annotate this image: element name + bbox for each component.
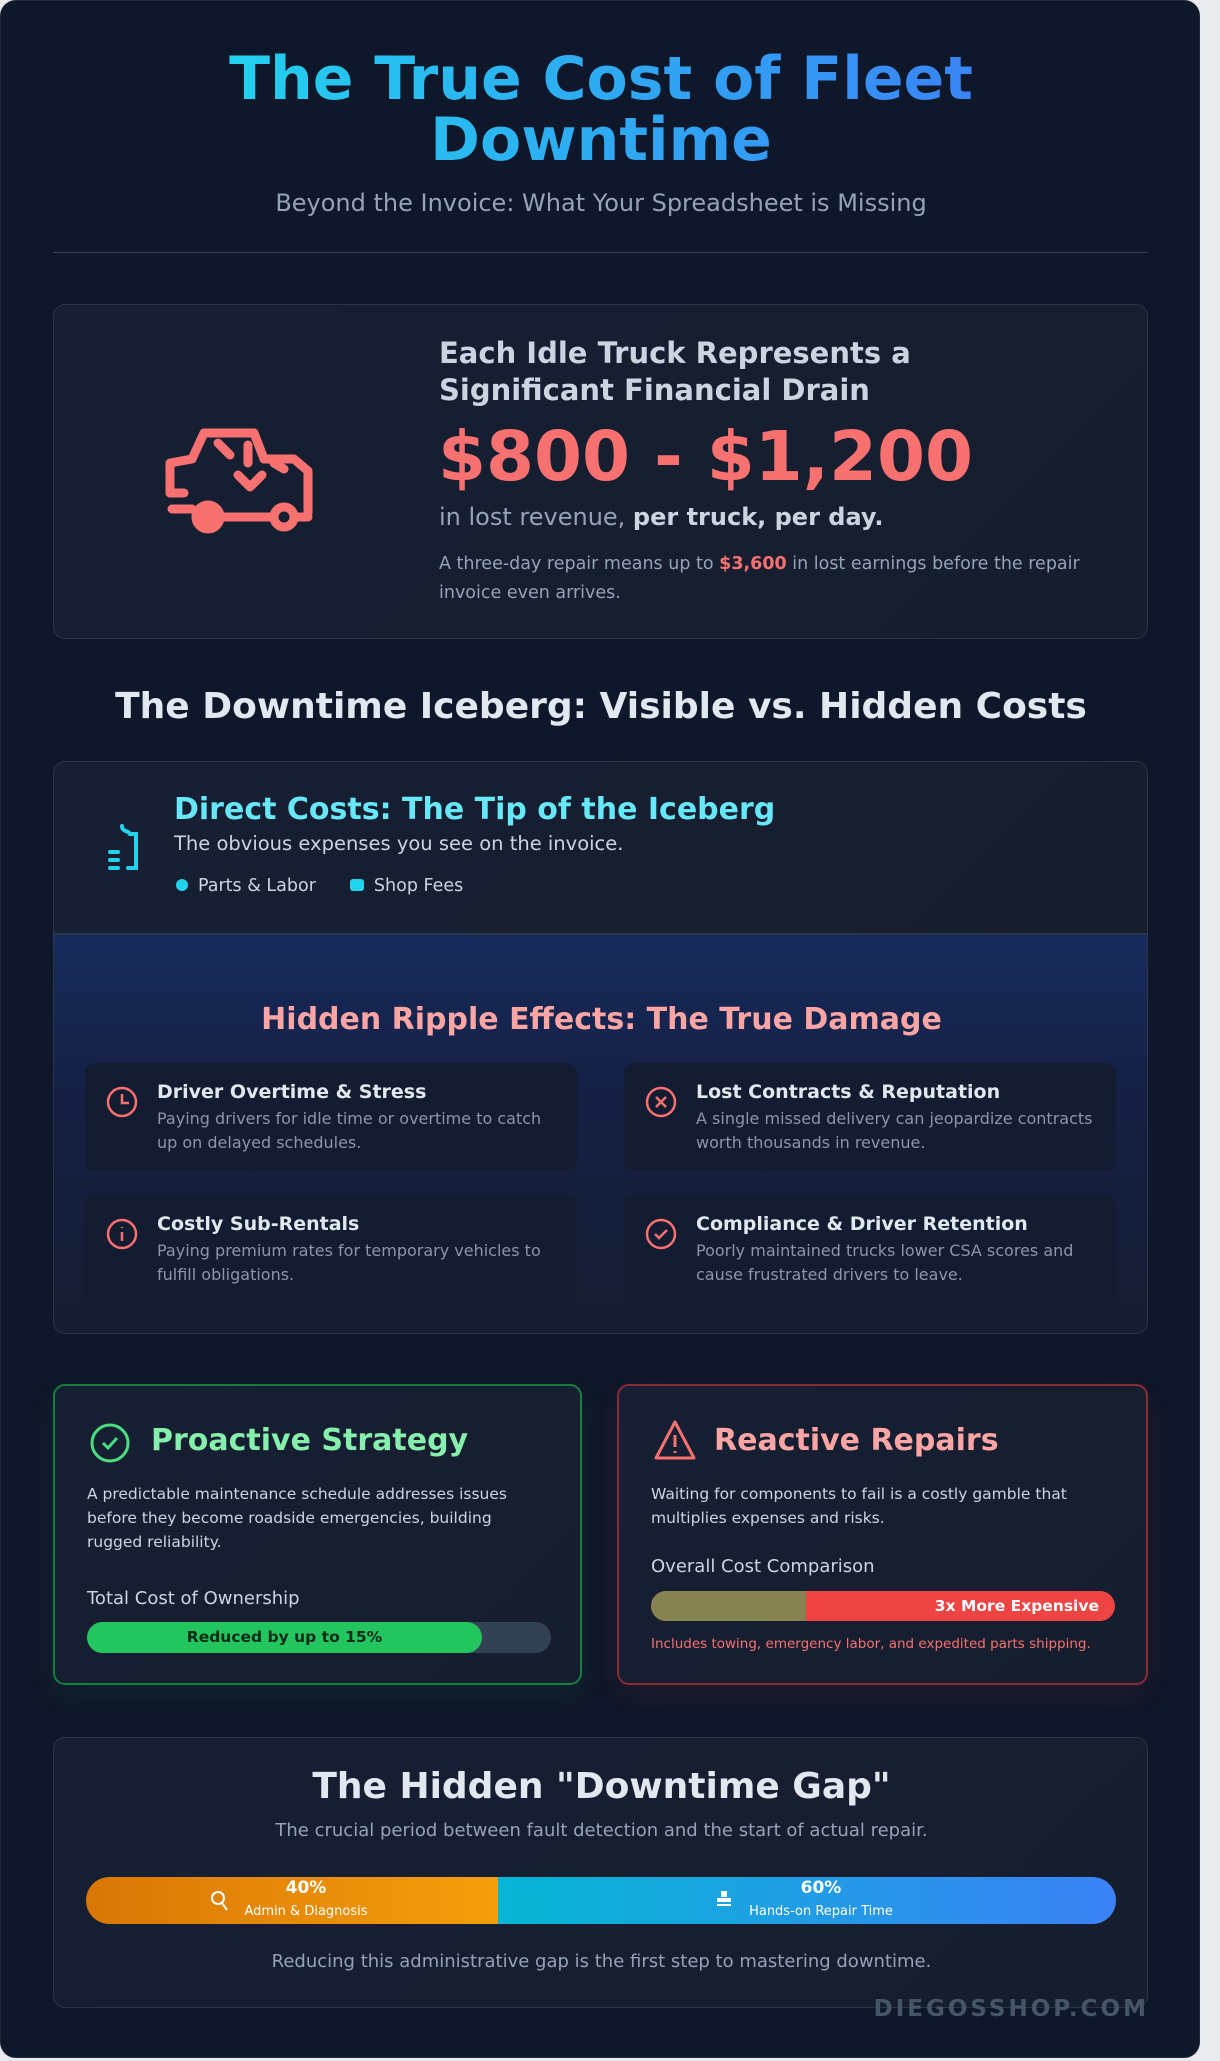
heading bbox=[439, 336, 911, 407]
icon: truck bbox=[166, 428, 312, 534]
panel: direct costs bbox=[53, 761, 1148, 934]
card: contracts: A single missed delivery can jeopardize contracts worth thousands in revenue. bbox=[696, 1109, 1092, 1152]
bar: TCO bbox=[87, 1622, 551, 1653]
revenue text: in lost revenue, per truck, per day. bbox=[439, 503, 883, 531]
section heading: The Downtime Iceberg: Visible vs. Hidden Costs bbox=[115, 686, 1087, 727]
icon: receipt bbox=[108, 824, 138, 870]
subtitle: The crucial period between fault detection and the start of actual repair. bbox=[275, 1820, 928, 1841]
title: Reactive Repairs bbox=[714, 1423, 999, 1458]
heading: Hidden Ripple Effects: The True Damage bbox=[261, 1002, 942, 1037]
tags: Parts & Labor Shop Fees bbox=[198, 876, 463, 896]
segment: admin: Admin & Diagnosis bbox=[244, 1904, 368, 1919]
icon: warning bbox=[654, 1420, 696, 1460]
heading: Each Idle Truck Represents a bbox=[439, 336, 911, 370]
bar: TCO: Reduced by up to 15% bbox=[187, 1628, 382, 1646]
big number: $800 - $1,200 bbox=[438, 417, 973, 497]
desc: Waiting for components to fail is a costly gamble that multiplies expenses and risks. bbox=[651, 1485, 1067, 1527]
title: Direct Costs: The Tip of the Iceberg bbox=[174, 792, 775, 827]
subtitle: The obvious expenses you see on the invoice. bbox=[174, 832, 623, 855]
note: A three-day repair means up to $3,600 in lost earnings before the repair invoice even arrives. bbox=[439, 554, 1080, 603]
title: Proactive Strategy bbox=[151, 1423, 468, 1458]
panel: downtime gap bbox=[53, 1737, 1148, 2008]
card: contracts: Lost Contracts & Reputation bbox=[696, 1081, 1000, 1103]
note: Includes towing, emergency labor, and expedited parts shipping. bbox=[651, 1636, 1091, 1652]
card: overtime: Driver Overtime & Stress bbox=[157, 1081, 426, 1103]
footer text: Reducing this administrative gap is the first step to mastering downtime. bbox=[272, 1951, 931, 1972]
title: The Hidden "Downtime Gap" bbox=[312, 1766, 891, 1807]
panel: hidden costs bbox=[53, 934, 1148, 1334]
panel: proactive bbox=[53, 1384, 582, 1685]
title: The True Cost of Fleet Downtime bbox=[229, 44, 973, 175]
card: sub-rentals: Paying premium rates for temporary vehicles to fulfill obligations. bbox=[157, 1241, 541, 1284]
panel: reactive bbox=[617, 1384, 1148, 1685]
label: Overall Cost Comparison bbox=[651, 1556, 875, 1577]
bar: gap bbox=[86, 1877, 1116, 1924]
card: contracts bbox=[624, 1063, 1116, 1171]
card: compliance: Compliance & Driver Retention bbox=[696, 1213, 1028, 1235]
card: compliance: Poorly maintained trucks lower CSA scores and cause frustrated drivers to leave. bbox=[696, 1241, 1073, 1284]
card: overtime bbox=[85, 1063, 577, 1171]
icon: check bbox=[90, 1424, 130, 1462]
bar: cost comparison: 3x More Expensive bbox=[935, 1597, 1099, 1615]
bar: cost comparison bbox=[651, 1591, 1115, 1621]
card: overtime: Paying drivers for idle time or overtime to catch up on delayed schedules. bbox=[157, 1109, 541, 1152]
card: compliance bbox=[624, 1195, 1116, 1303]
panel: daily cost bbox=[53, 304, 1148, 639]
card: sub-rentals: Costly Sub-Rentals bbox=[157, 1213, 359, 1235]
card: sub-rentals bbox=[85, 1195, 577, 1303]
segment: repair: Hands-on Repair Time bbox=[749, 1904, 893, 1919]
watermark: DIEGOSSHOP.COM bbox=[874, 1996, 1149, 2022]
segment: repair bbox=[498, 1877, 1116, 1924]
desc: A predictable maintenance schedule addresses issues before they become roadside emergencies, building rugged reliability. bbox=[87, 1485, 507, 1551]
segment: admin: 40% bbox=[286, 1878, 326, 1898]
subtitle: Beyond the Invoice: What Your Spreadsheet is Missing bbox=[275, 189, 927, 217]
segment: admin bbox=[86, 1877, 498, 1924]
segment: repair: 60% bbox=[801, 1878, 841, 1898]
label: Total Cost of Ownership bbox=[87, 1588, 300, 1609]
heading: Significant Financial Drain bbox=[439, 373, 870, 407]
